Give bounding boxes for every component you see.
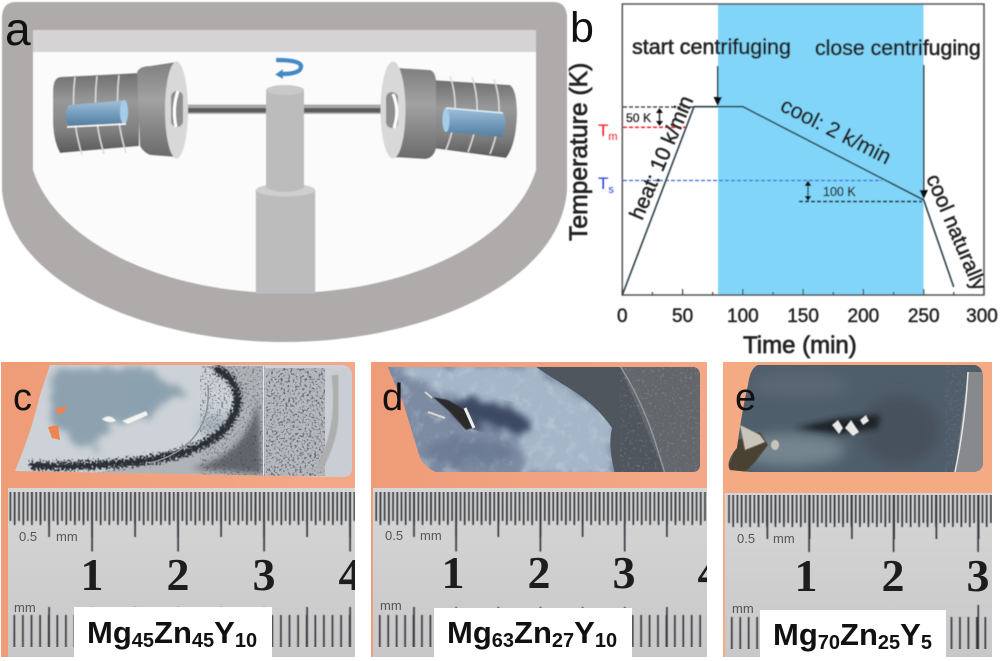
label a: a — [5, 3, 31, 55]
composition label e: Mg — [773, 617, 818, 652]
ruler e — [725, 493, 992, 657]
composition label d: Mg — [447, 615, 492, 650]
ruler unit labels d: 0.5 — [385, 528, 403, 543]
composition label c: 45 — [192, 630, 214, 652]
label d: d — [382, 377, 403, 419]
panel b: temperature profile chart — [566, 4, 998, 359]
panel a: centrifuge schematic — [2, 2, 567, 342]
chamber outer shell — [2, 2, 567, 342]
composition label e — [760, 610, 946, 657]
axis labels and annotations: 100 — [727, 306, 759, 327]
ruler unit labels e — [732, 531, 795, 616]
panel e: Mg70Zn25Y5 photo — [723, 362, 992, 657]
ruler unit labels d: mm — [380, 598, 402, 613]
ruler ticks d — [375, 505, 707, 634]
axis labels and annotations: 200 — [848, 306, 879, 327]
ruler numbers e: 1 — [794, 550, 818, 601]
composition label e: 70 — [818, 632, 840, 654]
axis ticks — [622, 289, 984, 295]
ruler numbers c — [84, 560, 355, 590]
composition label c — [74, 607, 272, 657]
label e: e — [735, 377, 756, 419]
reference dashed lines — [623, 107, 922, 202]
axis labels and annotations — [566, 35, 998, 359]
ruler unit labels c: mm — [56, 529, 78, 544]
ruler numbers c: 4 — [338, 549, 362, 600]
chamber lid band — [33, 30, 536, 52]
axis labels and annotations: m — [608, 131, 618, 143]
temperature curve — [622, 107, 954, 295]
specimen c — [15, 365, 352, 477]
composition label c: 10 — [235, 630, 257, 652]
ruler numbers d: 4 — [698, 547, 720, 598]
ruler unit labels c — [14, 529, 78, 615]
ruler unit labels e: mm — [732, 601, 754, 616]
left sample cylinder — [66, 100, 128, 127]
composition label c: Mg — [87, 615, 132, 650]
ruler numbers d: 3 — [612, 547, 636, 598]
label b: b — [570, 4, 594, 52]
ruler numbers d: 1 — [442, 547, 464, 598]
axis labels and annotations: 50 K — [626, 111, 651, 125]
ruler numbers e: 3 — [966, 550, 990, 601]
axis labels and annotations: cool naturally — [921, 171, 991, 294]
axis labels and annotations: T — [598, 174, 608, 193]
composition label c: Zn — [154, 615, 192, 650]
orange backdrop — [1, 362, 355, 657]
ruler unit labels e: mm — [773, 531, 795, 546]
composition label e: Y — [900, 617, 921, 652]
ruler numbers c: 1 — [80, 549, 104, 600]
composition label d: 63 — [492, 630, 514, 652]
chart frame — [622, 4, 984, 295]
composition label d: 10 — [595, 630, 617, 652]
composition label c: Y — [214, 615, 235, 650]
ruler unit labels c: mm — [14, 600, 36, 615]
axis labels and annotations: 300 — [966, 306, 998, 327]
panel d: Mg63Zn27Y10 photo — [371, 362, 720, 657]
composition label e: 5 — [921, 632, 932, 654]
orange backdrop — [723, 362, 992, 657]
lower support column — [256, 184, 315, 293]
ruler unit labels d — [380, 528, 442, 613]
ruler unit labels e: 0.5 — [737, 531, 755, 546]
axis labels and annotations: 0 — [617, 306, 628, 327]
axis labels and annotations: Time (min) — [743, 332, 857, 359]
ruler ticks c — [10, 505, 355, 634]
composition label c: 45 — [132, 630, 154, 652]
composition label d: Zn — [514, 615, 552, 650]
ruler numbers e: 2 — [882, 550, 904, 601]
axis labels and annotations: s — [608, 184, 614, 196]
axis labels and annotations: close centrifuging — [815, 36, 981, 60]
composition label d: 27 — [552, 630, 574, 652]
arrows — [656, 65, 928, 201]
axis labels and annotations: T — [598, 121, 608, 140]
axis labels and annotations: 150 — [787, 306, 819, 327]
rods — [184, 104, 387, 114]
axis labels and annotations: heat: 10 k/min — [625, 93, 698, 223]
ruler c — [8, 488, 362, 657]
composition label e: Zn — [840, 617, 878, 652]
composition label d — [434, 608, 632, 657]
axis labels and annotations: 50 — [672, 306, 693, 327]
panel c: Mg45Zn45Y10 photo — [0, 362, 362, 657]
ruler unit labels d: mm — [420, 528, 442, 543]
axis labels and annotations: cool: 2 k/min — [777, 93, 895, 169]
ruler numbers c: 3 — [252, 549, 276, 600]
axis labels and annotations: 100 K — [823, 185, 856, 199]
right sample cylinder — [442, 108, 505, 137]
ruler numbers e — [798, 560, 988, 592]
axis labels and annotations: Temperature (K) — [566, 63, 593, 241]
axis labels and annotations: 250 — [908, 306, 940, 327]
upper rotating column — [266, 85, 304, 192]
specimen d — [388, 367, 700, 472]
left crucible drum — [53, 62, 188, 158]
ruler unit labels c: 0.5 — [19, 529, 37, 544]
ruler numbers d: 2 — [528, 547, 550, 598]
orange backdrop — [371, 362, 707, 657]
specimen e — [725, 362, 985, 477]
ruler numbers c: 2 — [166, 549, 190, 600]
chamber inner space — [33, 52, 536, 293]
right crucible drum — [380, 62, 517, 159]
ruler d — [373, 488, 720, 657]
ruler numbers d — [445, 558, 707, 588]
composition label e: 25 — [878, 632, 900, 654]
axis labels and annotations: start centrifuging — [632, 35, 791, 59]
label c: c — [13, 377, 32, 419]
composition label d: Y — [574, 615, 595, 650]
centrifuging window — [718, 4, 924, 295]
icon: rotation arrow — [275, 60, 301, 79]
ruler ticks e — [728, 508, 992, 636]
